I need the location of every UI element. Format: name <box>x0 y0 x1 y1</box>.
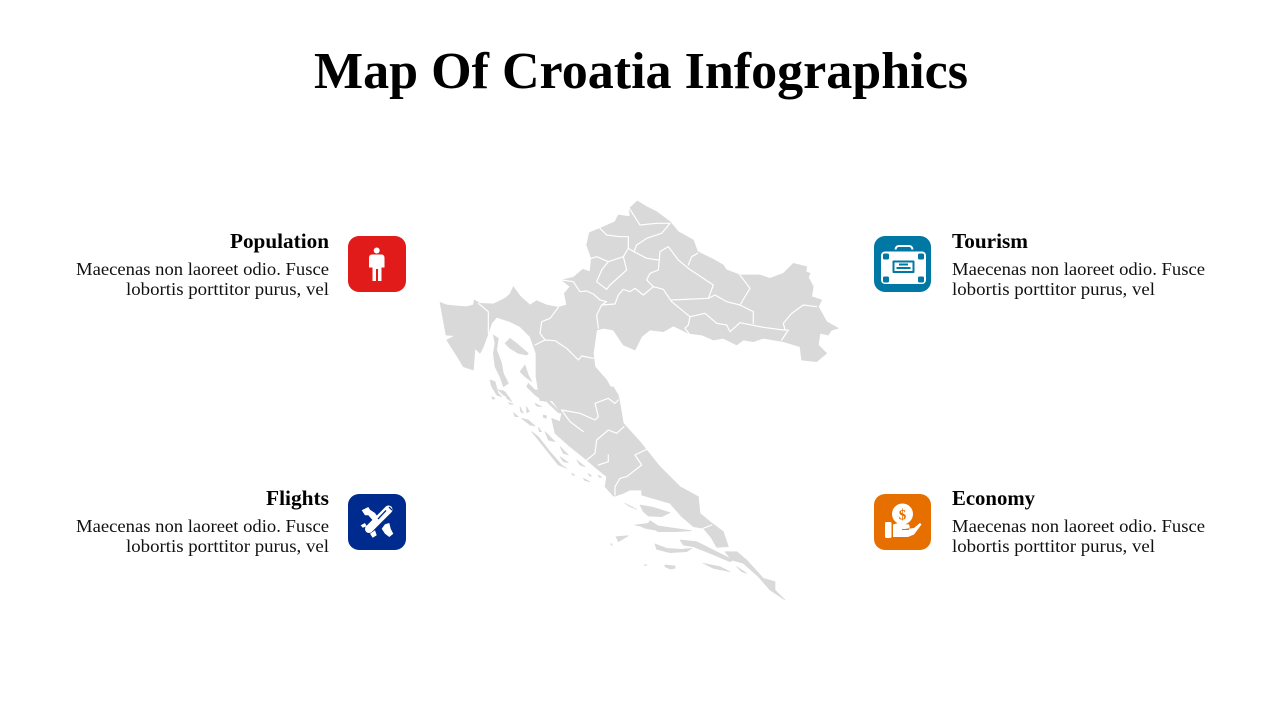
Kvarner islands <box>490 335 545 402</box>
panel: flights <box>76 486 406 556</box>
text block <box>952 516 1205 556</box>
text block: Maecenas non laoreet odio. Fusce <box>952 259 1205 279</box>
text block: lobortis porttitor purus, vel <box>952 279 1155 299</box>
heading: Tourism <box>952 229 1028 253</box>
title: Map Of Croatia Infographics <box>314 43 968 100</box>
southern counties and Dalmatian coast <box>492 387 785 600</box>
icon: person <box>348 236 406 292</box>
text block: lobortis porttitor purus, vel <box>952 536 1155 556</box>
Adriatic islands <box>492 390 785 600</box>
panel: tourism <box>874 229 1205 299</box>
text block: lobortis porttitor purus, vel <box>126 536 329 556</box>
text block <box>76 259 329 299</box>
icon: airplane <box>348 494 406 550</box>
text block: lobortis porttitor purus, vel <box>126 279 329 299</box>
map of Croatia <box>440 201 838 600</box>
icon: suitcase <box>874 236 931 292</box>
panel: economy <box>874 486 1205 556</box>
heading: Economy <box>952 486 1035 510</box>
text block <box>952 259 1205 299</box>
heading: Flights <box>266 486 329 510</box>
text block: Maecenas non laoreet odio. Fusce <box>76 259 329 279</box>
text block: Maecenas non laoreet odio. Fusce <box>76 516 329 536</box>
text block: Maecenas non laoreet odio. Fusce <box>952 516 1205 536</box>
icon: hand holding coin <box>874 494 931 550</box>
text block <box>76 516 329 556</box>
icon: hand holding coin: $ <box>899 508 907 524</box>
heading: Population <box>230 229 329 253</box>
panel: population <box>76 229 406 299</box>
northern and central counties <box>440 201 838 401</box>
